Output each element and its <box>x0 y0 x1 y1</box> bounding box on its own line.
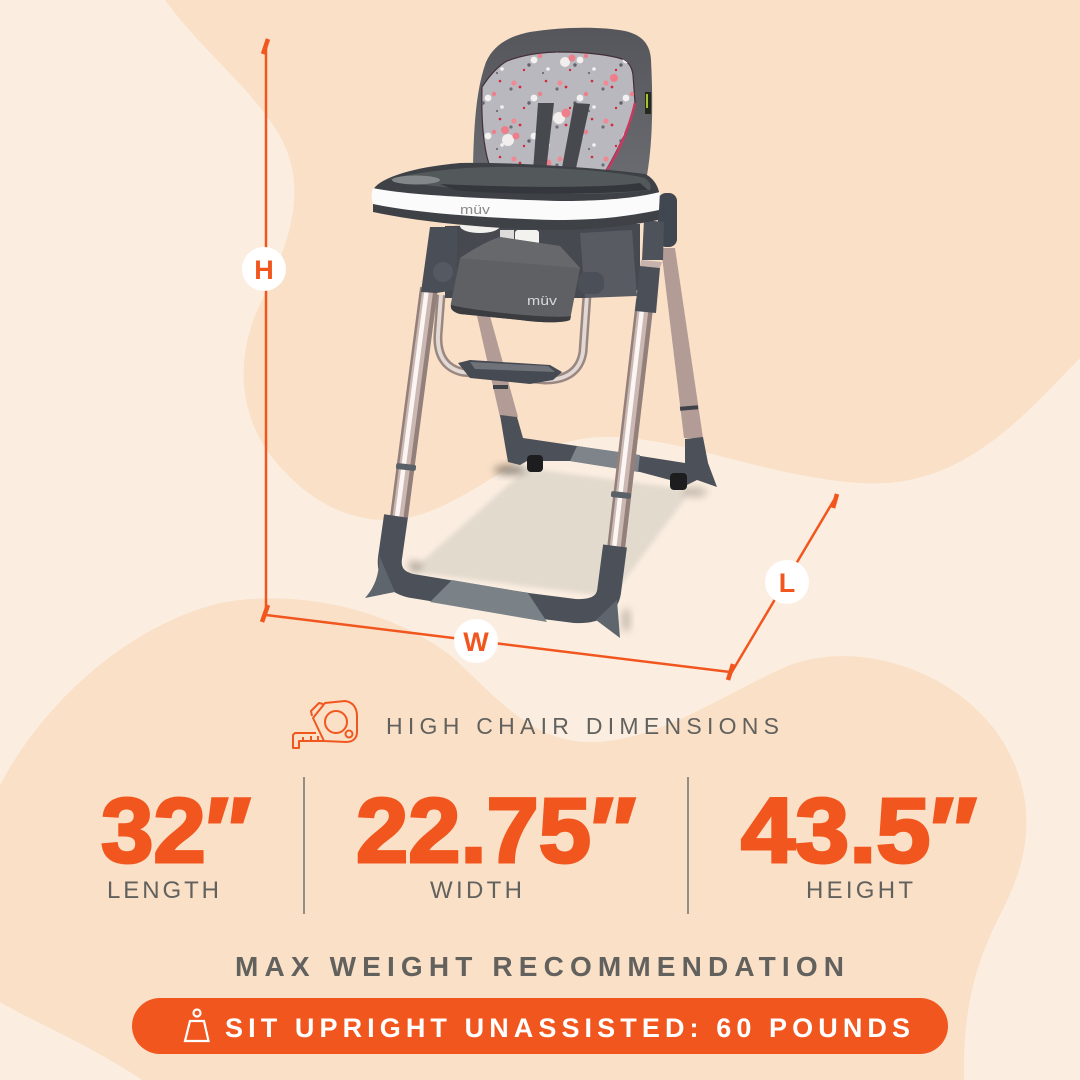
badge L <box>765 560 809 604</box>
top background blob <box>165 0 1080 520</box>
pill text: SIT UPRIGHT UNASSISTED: 60 POUNDS <box>225 1013 910 1043</box>
bottom background blob <box>0 598 1026 1080</box>
tray <box>372 163 660 230</box>
stat: height: 43.5″ <box>741 780 977 882</box>
logo on flap: müv <box>527 293 558 308</box>
icon: weight <box>185 1010 208 1041</box>
front base <box>365 516 620 638</box>
badge H <box>242 247 286 291</box>
stat: length: LENGTH <box>107 877 219 904</box>
heading: high chair dimensions: HIGH CHAIR DIMENSIONS <box>386 713 779 739</box>
divider <box>687 777 689 914</box>
badge W <box>454 619 498 663</box>
dimension line: height <box>242 39 286 622</box>
dimension line: length <box>730 494 837 675</box>
badge L: L <box>779 568 795 598</box>
logo on tray: müv <box>460 202 491 217</box>
dimension line: width <box>266 615 733 680</box>
footrest <box>458 360 562 384</box>
rear base <box>500 415 717 490</box>
stat: length: 32″ <box>101 780 251 882</box>
stat: width: 22.75″ <box>356 780 636 882</box>
front left leg <box>396 288 429 517</box>
floral seat pad <box>482 52 635 172</box>
badge H: H <box>254 255 274 285</box>
weight recommendation pill <box>132 998 948 1054</box>
under seat mechanism <box>421 193 677 313</box>
high chair illustration <box>365 28 717 638</box>
divider <box>303 777 305 914</box>
stat: width: WIDTH <box>430 877 522 904</box>
badge W: W <box>463 627 489 657</box>
seat cushion flap <box>451 237 580 322</box>
icon: tape measure <box>293 701 357 748</box>
rear legs <box>477 248 703 438</box>
stat: height: HEIGHT <box>806 877 913 904</box>
heading: max weight recommendation: MAX WEIGHT RECOMMENDATION <box>235 951 844 982</box>
floor shadow <box>410 468 692 597</box>
harness straps <box>533 103 554 171</box>
seat back <box>473 28 652 175</box>
front right leg <box>611 300 645 549</box>
footrest tube <box>438 295 587 380</box>
